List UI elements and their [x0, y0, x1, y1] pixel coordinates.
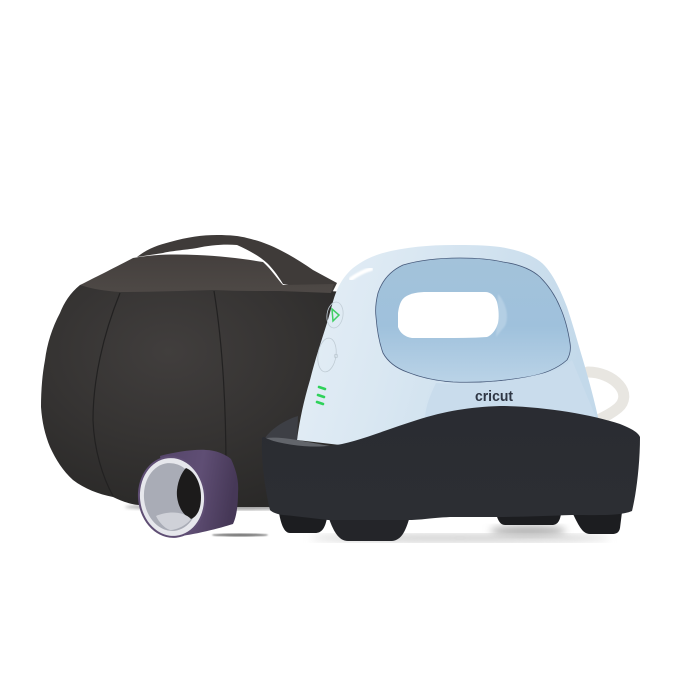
- bag handle: [137, 235, 337, 293]
- floor shadows: [125, 504, 610, 542]
- tray body: [262, 406, 640, 520]
- bag body: [41, 285, 345, 507]
- tape front rim: [134, 453, 210, 541]
- tape inner floor highlight: [156, 513, 191, 530]
- power cord: [588, 372, 624, 420]
- travel bag: [41, 235, 345, 507]
- storage tray: [262, 406, 640, 520]
- temperature indicators: [317, 387, 325, 404]
- bag seams: [93, 293, 120, 496]
- tape core hole: [177, 468, 201, 519]
- tape outer side: [160, 450, 238, 537]
- bag top panel: [80, 254, 334, 293]
- tray inner rim: [265, 416, 298, 446]
- front lower panel: [425, 360, 597, 425]
- highlight: [351, 269, 371, 279]
- handle opening: [398, 292, 499, 338]
- brand logo: cricut: [475, 388, 513, 405]
- handle recess: [376, 258, 570, 382]
- heat press body: [297, 245, 600, 452]
- play button: [325, 301, 345, 329]
- handle inner shading: [496, 294, 507, 337]
- tray feet: [279, 512, 622, 541]
- dial button: [316, 337, 338, 373]
- tape roll: [134, 450, 238, 541]
